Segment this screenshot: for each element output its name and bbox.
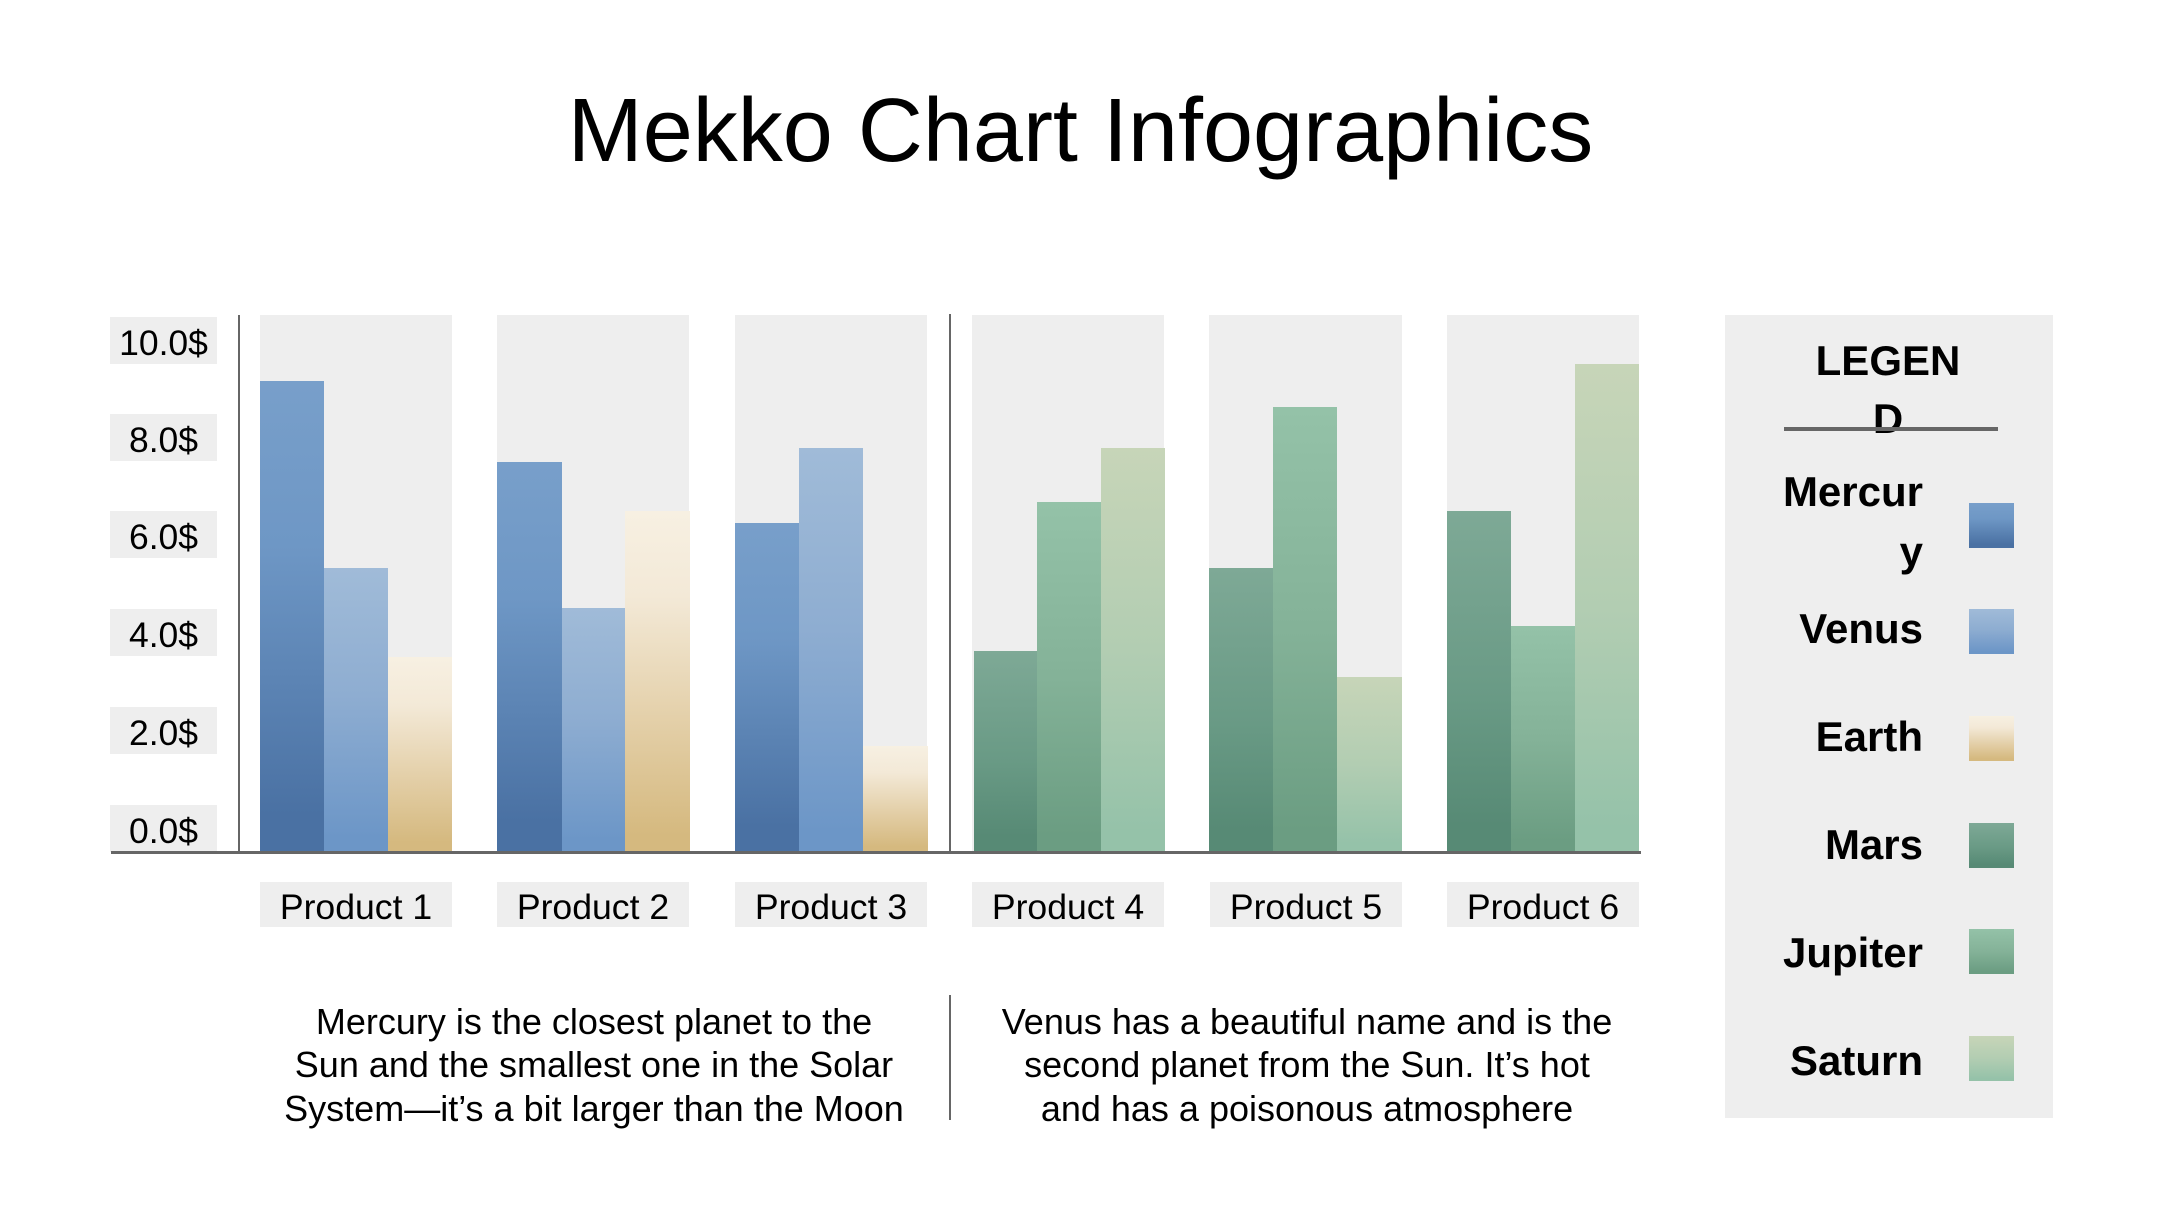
- text block: Venus: and has a poisonous atmosphere: [1041, 1088, 1573, 1129]
- text block: Venus: Venus has a beautiful name and is the: [1002, 1000, 1612, 1042]
- legend label: Mercury: Mercur: [1783, 468, 1923, 515]
- panel: Product 1: [260, 315, 452, 852]
- swatch: Earth: [1969, 716, 2014, 761]
- legend label: Mars: Mars: [1825, 821, 1923, 868]
- swatch: Mercury: [1969, 503, 2014, 548]
- legend label: Mercury: [1783, 468, 1923, 575]
- x axis line: [111, 851, 1641, 854]
- panel: Product 2: [497, 315, 689, 852]
- y axis labels: 10.0$: [119, 323, 208, 363]
- swatch: Jupiter: [1969, 929, 2014, 974]
- y axis labels: 4.0$: [129, 615, 198, 655]
- panel: Product 4: [972, 315, 1164, 852]
- legend heading: [1816, 337, 1960, 442]
- legend heading: D: [1873, 395, 1903, 442]
- y axis labels: 6.0$: [129, 517, 198, 557]
- legend label: Saturn: Saturn: [1790, 1037, 1923, 1084]
- legend label: Jupiter: Jupiter: [1783, 929, 1923, 976]
- panel: Product 6: [1447, 315, 1639, 852]
- y axis labels: 8.0$: [129, 420, 198, 460]
- text block: Venus: [1002, 1000, 1612, 1129]
- y axis labels: 2.0$: [129, 713, 198, 753]
- y axis labels: 0.0$: [129, 811, 198, 851]
- text block: Mercury: System—it’s a bit larger than the Moon: [284, 1088, 904, 1129]
- legend heading underline: [1784, 427, 1998, 431]
- y axis line: [238, 315, 240, 853]
- legend heading: LEGEN: [1816, 337, 1960, 384]
- title: Mekko Chart Infographics: [568, 81, 1593, 181]
- panel: legend: [1725, 315, 2053, 1118]
- swatch: Saturn: [1969, 1036, 2014, 1081]
- centre divider line: [949, 314, 951, 852]
- legend label: Mercury: y: [1900, 528, 1923, 575]
- text block: Mercury: Mercury is the closest planet to the: [316, 1000, 872, 1042]
- product label 3: Product 3: [755, 887, 907, 927]
- panel: Product 3: [735, 315, 927, 852]
- legend label: Venus: Venus: [1799, 605, 1923, 652]
- legend label: Earth: Earth: [1816, 713, 1923, 760]
- swatch: Mars: [1969, 823, 2014, 868]
- text block: Venus: second planet from the Sun. It’s hot: [1024, 1044, 1590, 1085]
- panel: Product 5: [1209, 315, 1402, 852]
- product label 1: Product 1: [280, 887, 432, 927]
- y axis labels: [110, 317, 217, 852]
- paragraph divider: [949, 995, 951, 1120]
- text block: Mercury: [284, 1000, 904, 1129]
- text block: Mercury: Sun and the smallest one in the Solar: [295, 1044, 893, 1085]
- swatch: Venus: [1969, 609, 2014, 654]
- product label 6: Product 6: [1467, 887, 1619, 927]
- product label 4: Product 4: [992, 887, 1144, 927]
- product label 5: Product 5: [1230, 887, 1382, 927]
- product label 2: Product 2: [517, 887, 669, 927]
